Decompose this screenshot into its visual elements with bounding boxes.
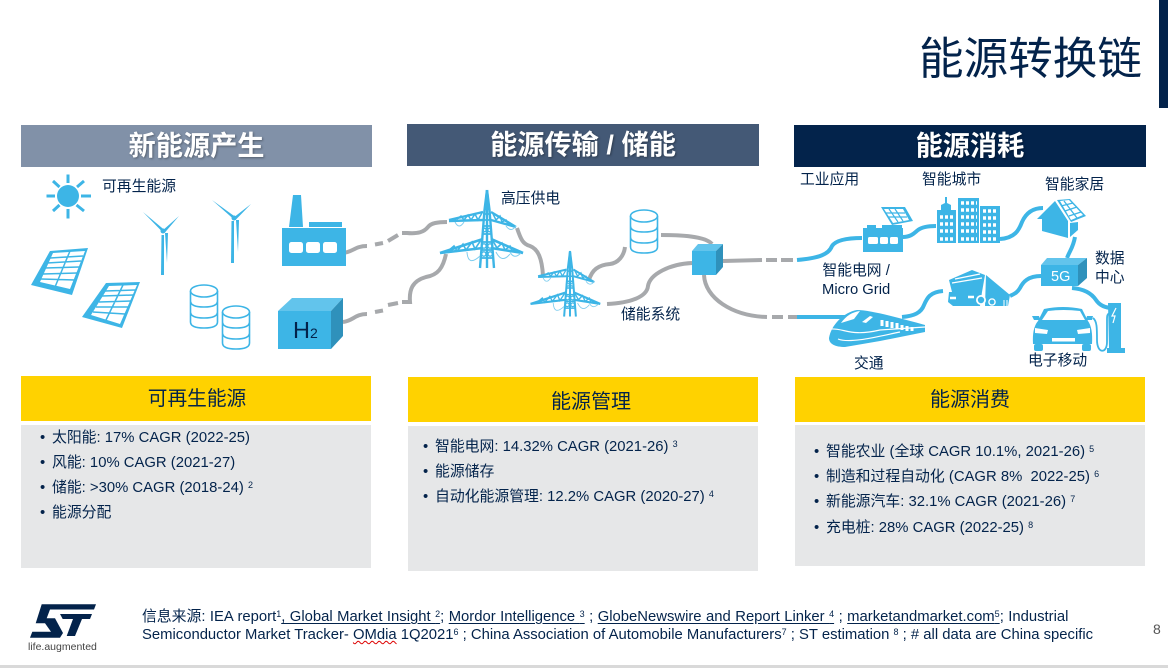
panel: energy consumption stats: •	[814, 494, 819, 510]
heading: energy consumption	[794, 125, 1146, 167]
label: renewable energy: 可再生能源	[102, 179, 176, 195]
connector lines: generation to high-voltage grid	[343, 222, 797, 322]
bullet: solar: 太阳能: 17% CAGR (2022-25)	[52, 430, 250, 446]
icon: storage database	[630, 210, 658, 253]
icon: hydrogen cube: H2	[293, 317, 318, 343]
panel: renewable energy stats: •	[40, 455, 45, 471]
icon: transmission tower 2	[531, 251, 600, 317]
heading: energy transmission and storage	[407, 124, 759, 166]
icon: transmission tower 1	[440, 190, 523, 268]
panel: energy consumption stats: •	[814, 444, 819, 460]
panel: renewable energy stats: •	[40, 505, 45, 521]
icon: smart home	[1037, 199, 1086, 238]
panel: energy management stats: •	[423, 439, 428, 455]
icon: high-speed train	[829, 310, 925, 347]
icon: smart city buildings	[937, 197, 1000, 243]
label: data centre	[1095, 250, 1125, 286]
bullet: wind: 风能: 10% CAGR (2021-27)	[52, 455, 235, 471]
panel: renewable energy stats: •	[40, 480, 45, 496]
bullet: energy storage: 能源储存	[435, 464, 494, 480]
panel header: energy consumption: 能源消费	[930, 389, 1010, 411]
icon: solar panel 1	[31, 248, 88, 295]
label: transport: 交通	[854, 356, 884, 372]
label: storage system: 储能系统	[621, 307, 680, 323]
panel header: energy management	[408, 377, 758, 422]
bottom rule	[0, 665, 1168, 668]
bullet: automated energy management: 自动化能源管理: 12.2% CAGR (2020-27) 4	[435, 489, 714, 505]
footnote sources	[142, 608, 1093, 644]
panel: energy management stats: •	[423, 489, 428, 505]
label: smart home: 智能家居	[1045, 177, 1104, 193]
bullet: new energy vehicles: 新能源汽车: 32.1% CAGR (2021-26) 7	[826, 494, 1075, 510]
logo tagline: life.augmented	[28, 641, 97, 653]
bullet: charging piles: 充电桩: 28% CAGR (2022-25) 8	[826, 520, 1033, 536]
panel: energy consumption stats	[795, 425, 1145, 566]
icon: smart grid factory	[863, 207, 913, 252]
heading: energy consumption: 能源消耗	[916, 130, 1024, 161]
label: smart grid: Micro Grid	[822, 282, 890, 298]
icon: solar panel 2	[82, 282, 140, 328]
label: high-voltage supply: 高压供电	[501, 191, 560, 207]
icon: battery storage pair	[190, 285, 250, 349]
icon: 5G data centre: 5G	[1051, 269, 1070, 285]
bullet: smart agriculture: 智能农业 (全球 CAGR 10.1%, 2021-26) 5	[826, 444, 1094, 460]
panel header: renewable energy	[21, 376, 371, 421]
icon: electric car	[1032, 307, 1093, 351]
bullet: distribution: 能源分配	[52, 505, 111, 521]
panel: energy management stats: •	[423, 464, 428, 480]
heading: energy generation	[21, 125, 372, 167]
bullet: manufacturing: 制造和过程自动化 (CAGR 8% 2022-25) 6	[826, 469, 1099, 485]
label: data centre: 中心	[1095, 270, 1125, 286]
icon: truck	[948, 270, 1010, 306]
label: smart grid	[822, 262, 890, 298]
icon: wind turbine 1	[143, 212, 179, 275]
icon: factory	[282, 195, 346, 266]
icon: hydrogen cube	[278, 298, 343, 349]
icon: charging station	[1093, 303, 1125, 353]
panel header: renewable energy: 可再生能源	[148, 388, 246, 410]
panel header: energy management: 能源管理	[551, 391, 631, 413]
panel: energy consumption stats: •	[814, 469, 819, 485]
label: data centre: 数据	[1095, 251, 1125, 267]
logo: ST	[30, 604, 96, 638]
label: e-mobility: 电子移动	[1028, 353, 1087, 369]
bullet: storage: 储能: >30% CAGR (2018-24) 2	[52, 480, 253, 496]
panel: energy consumption stats: •	[814, 520, 819, 536]
icon: sun	[46, 174, 91, 218]
connector lines: consumption network	[797, 208, 1113, 317]
footnote sources: 信息来源: IEA report1, Global Market Insight 2; Mordor Intelligence 3 ; GlobeNewswire and Report Linker 4 ; marketandmarket.com5; Industrial	[142, 609, 1068, 625]
panel header: energy consumption	[795, 377, 1145, 422]
page number: 8	[1153, 621, 1161, 637]
icon: wind turbine 2	[212, 200, 251, 263]
corner accent bar	[1159, 0, 1168, 108]
icon: junction cube	[692, 244, 723, 275]
label: industrial applications: 工业应用	[800, 172, 859, 188]
icon: 5G data centre	[1041, 258, 1087, 286]
title: 能源转换链	[919, 35, 1142, 84]
label: smart city: 智能城市	[922, 172, 981, 188]
bullet: smart grid: 智能电网: 14.32% CAGR (2021-26) 3	[435, 439, 678, 455]
heading: energy generation: 新能源产生	[129, 130, 264, 161]
footnote sources: Semiconductor Market Tracker- OMdia 1Q20216 ; China Association of Automobile Manufacturers7 ; ST estimation 8 ; # all data are China specific	[142, 627, 1093, 643]
panel: renewable energy stats: •	[40, 430, 45, 446]
panel: renewable energy stats	[21, 425, 371, 568]
heading: energy transmission and storage: 能源传输 / 储能	[490, 129, 676, 160]
panel: energy management stats	[408, 426, 758, 571]
label: smart grid: 智能电网 /	[822, 263, 890, 279]
